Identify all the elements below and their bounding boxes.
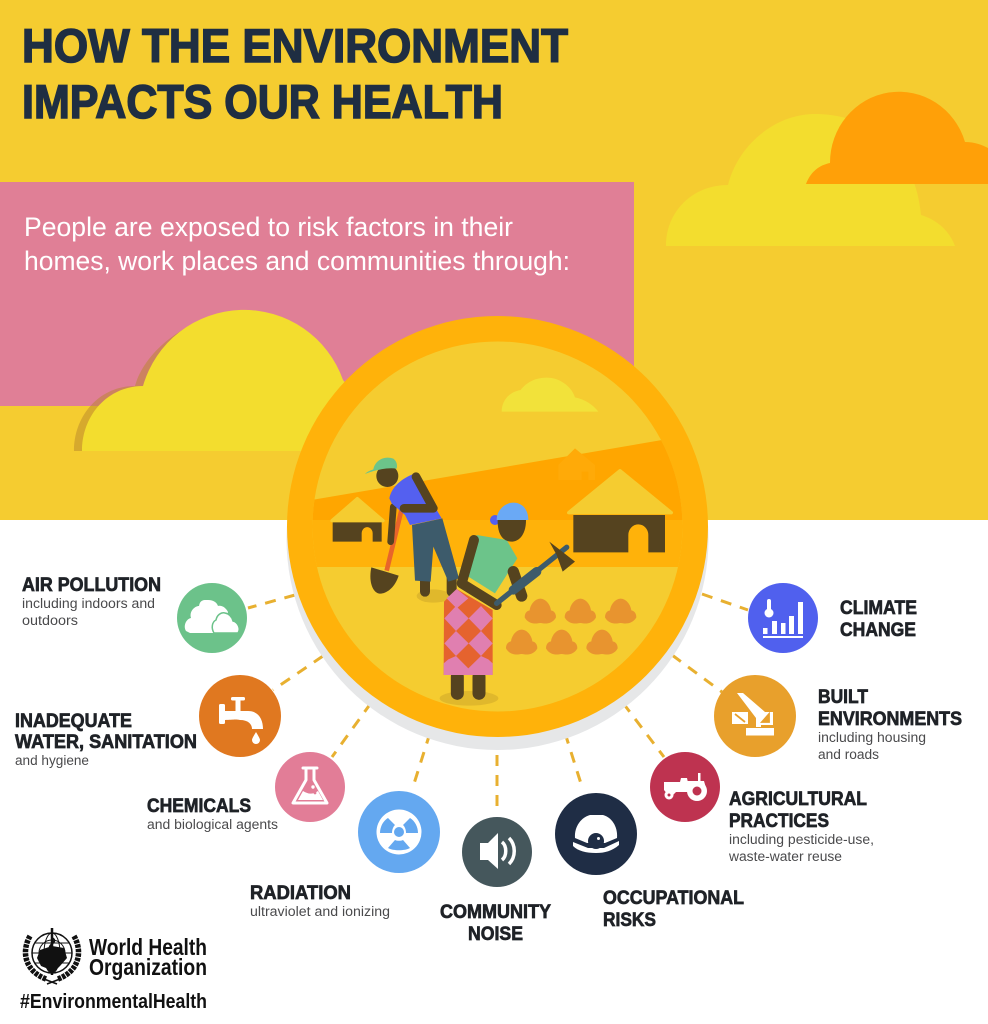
- title: IMPACTS OUR HEALTH: [22, 75, 503, 128]
- icon: occupational risks helmet: [555, 793, 637, 875]
- label: radiation: RADIATION: [250, 882, 351, 904]
- small cloud: [502, 378, 598, 412]
- label: built environments: ENVIRONMENTS: [818, 708, 962, 730]
- logo text: World Health Organization: World Health: [89, 934, 207, 960]
- label: air pollution: including indoors and: [22, 596, 155, 611]
- label: agricultural practices: waste-water reuse: [728, 849, 842, 864]
- left house: [332, 499, 383, 542]
- label: inadequate water: and hygiene: [15, 753, 89, 768]
- label: chemicals: and biological agents: [147, 817, 278, 832]
- label: occupational risks: OCCUPATIONAL: [603, 887, 744, 909]
- label: community noise: [440, 901, 551, 945]
- intro text: People are exposed to risk factors in their: [24, 212, 513, 242]
- central illustration: farmers in a circle: [286, 316, 708, 750]
- label: inadequate water: WATER, SANITATION: [15, 731, 197, 753]
- logo text: World Health Organization: Organization: [89, 954, 207, 980]
- man with shovel: [365, 458, 459, 603]
- right house: [569, 471, 671, 552]
- panel: pink intro block: [0, 182, 634, 406]
- label: community noise: COMMUNITY: [440, 901, 551, 923]
- label: occupational risks: RISKS: [603, 909, 656, 931]
- icon: community noise speaker: [462, 817, 532, 887]
- icon: air pollution cloud: [177, 583, 247, 653]
- label: agricultural practices: PRACTICES: [729, 810, 829, 832]
- icon: water tap: [199, 675, 281, 757]
- label: climate change: CLIMATE: [840, 597, 917, 619]
- soil mounds: [506, 599, 636, 655]
- logo text: World Health Organization: [89, 934, 207, 980]
- panel: yellow sky background: [0, 0, 988, 520]
- label: built environments: including housing: [818, 730, 926, 745]
- icon: built environments crane: [714, 675, 796, 757]
- label: chemicals: [147, 795, 278, 832]
- cloud: top right orange: [806, 92, 988, 184]
- cloud: top right pale: [666, 114, 955, 246]
- label: chemicals: CHEMICALS: [147, 795, 251, 817]
- intro text: [24, 212, 570, 276]
- icon: radiation: [358, 791, 440, 873]
- label: agricultural practices: [728, 788, 874, 864]
- label: air pollution: AIR POLLUTION: [22, 574, 161, 596]
- far house: [558, 448, 595, 480]
- label: agricultural practices: AGRICULTURAL: [729, 788, 867, 810]
- label: radiation: [250, 882, 390, 919]
- intro text: homes, work places and communities through:: [24, 246, 570, 276]
- label: built environments: [818, 686, 962, 762]
- logo: World Health Organization emblem: [25, 928, 79, 984]
- label: radiation: ultraviolet and ionizing: [250, 904, 390, 919]
- icon: climate change chart: [748, 583, 818, 653]
- label: inadequate water: [15, 710, 197, 768]
- label: climate change: CHANGE: [840, 619, 916, 641]
- label: climate change: [840, 597, 917, 641]
- icon: chemicals flask: [275, 752, 345, 822]
- label: agricultural practices: including pesticide-use,: [729, 832, 874, 847]
- label: built environments: BUILT: [818, 686, 868, 708]
- icon: agricultural tractor: [650, 752, 720, 822]
- title: [22, 19, 568, 128]
- woman with hoe: [440, 503, 575, 706]
- label: air pollution: [22, 574, 161, 628]
- dashed connector lines: [248, 594, 748, 815]
- title: HOW THE ENVIRONMENT: [22, 19, 568, 72]
- label: built environments: and roads: [818, 747, 879, 762]
- label: occupational risks: [603, 887, 744, 931]
- cloud: left bright yellow: [74, 310, 400, 451]
- label: community noise: NOISE: [468, 923, 523, 945]
- label: inadequate water: INADEQUATE: [15, 710, 132, 732]
- label: air pollution: outdoors: [22, 613, 78, 628]
- hashtag: #EnvironmentalHealth: [20, 991, 207, 1013]
